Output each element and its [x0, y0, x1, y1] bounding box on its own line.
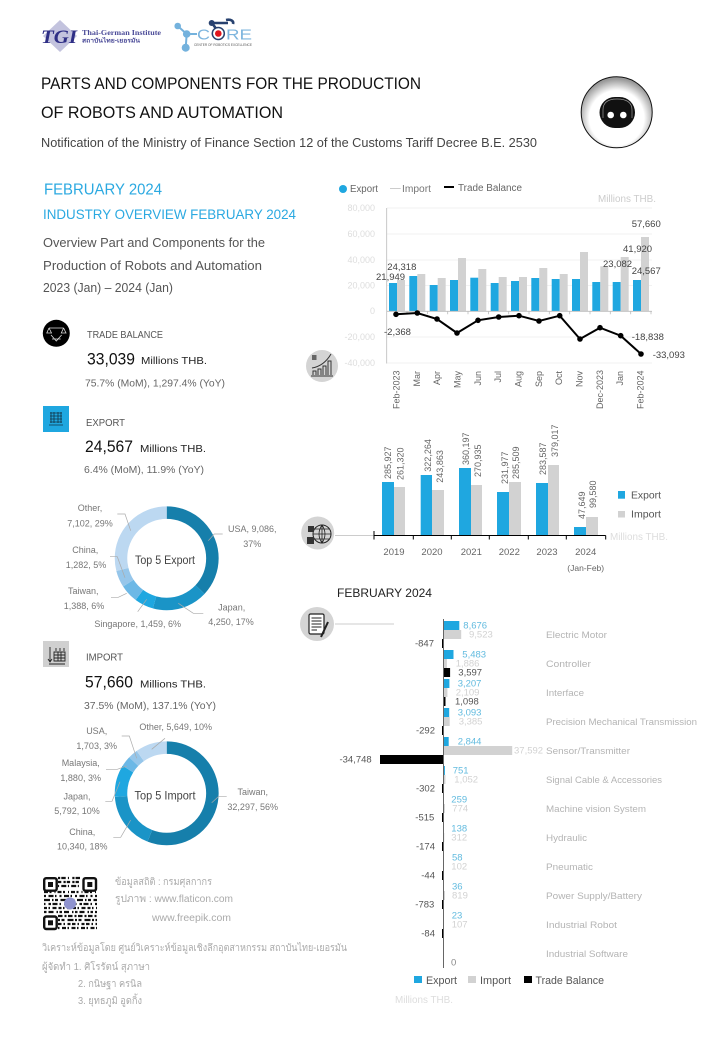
- icon: notebook: [300, 607, 334, 641]
- subtitle: Notification of the Ministry of Finance Section 12 of the Customs Tariff Decree B.E. 2530: [41, 135, 537, 150]
- year labels: 2020: [421, 547, 443, 558]
- data labels: 21,949: [376, 272, 405, 283]
- chart: top 5 import donut: Malaysia,: [62, 758, 100, 768]
- trade balance line: [393, 310, 644, 357]
- data labels: 24,567: [632, 266, 661, 277]
- chart: monthly export, import and trade balance: 40,000: [347, 255, 375, 265]
- data labels: -18,838: [632, 332, 664, 343]
- bar value labels: 283,587: [538, 442, 548, 475]
- month labels: May: [452, 371, 462, 388]
- month labels: Jul: [493, 371, 503, 383]
- trade balance values: -174: [416, 842, 435, 852]
- logo: CORE Center of Robotics Excellence: RE: [226, 26, 252, 44]
- chart: top 5 import donut: 10,340, 18%: [57, 842, 108, 852]
- category labels: Controller: [546, 659, 591, 670]
- trade balance values: [339, 638, 482, 968]
- category labels: Industrial Software: [546, 949, 628, 960]
- logo: CORE Center of Robotics Excellence: CENTER OF ROBOTICS EXCELLENCE: [194, 43, 252, 47]
- import values: 774: [452, 804, 468, 814]
- month labels: Dec-2023: [595, 370, 605, 409]
- import values: 107: [452, 920, 468, 930]
- month labels: Nov: [574, 371, 584, 387]
- export values: 3,207: [458, 678, 481, 690]
- chart: top 5 import donut: 5,792, 10%: [54, 806, 100, 816]
- text block: sources: ข้อมูลสถิติ : กรมศุลกากร: [115, 876, 213, 888]
- export values: 2,844: [458, 736, 481, 748]
- chart: top 5 export donut: China,: [72, 545, 98, 555]
- export values: 23: [452, 910, 462, 922]
- chart: top 5 export donut: Singapore, 1,459, 6%: [94, 619, 181, 629]
- bar value labels: 322,264: [423, 439, 433, 472]
- text block: overview: 2023 (Jan) – 2024 (Jan): [43, 280, 173, 295]
- chart: top 5 import donut: 1,880, 3%: [60, 773, 101, 783]
- icon: import goods: [43, 641, 69, 667]
- export values: 58: [452, 852, 463, 864]
- logo: TGI Thai-German Institute: Thai-German Institute: [82, 29, 161, 37]
- trade balance values: -302: [416, 784, 435, 794]
- text block: analysts: วิเคราะห์ข้อมูลโดย ศูนย์วิเคราะห์ข้อมูลเชิงลึกอุตสาหกรรม สถาบันไทย-เยอรมัน: [42, 941, 347, 954]
- chart: top 5 import donut: Taiwan,: [237, 787, 268, 797]
- panel: trade balance: 33,039: [87, 349, 135, 368]
- chart: monthly export, import and trade balance: -40,000: [344, 358, 375, 368]
- legend: [618, 490, 661, 520]
- panel: export: 24,567: [85, 437, 133, 456]
- export values: 3,093: [458, 708, 481, 718]
- category labels: Precision Mechanical Transmission: [546, 717, 697, 728]
- import bars: [397, 237, 649, 311]
- month labels: Sep: [534, 371, 544, 387]
- legend: Import: [402, 184, 431, 195]
- month labels: Mar: [412, 371, 422, 386]
- bar value labels: 231,977: [500, 451, 510, 484]
- trade balance values: -847: [415, 638, 434, 650]
- chart: top 5 export donut: Top 5 Export: [135, 553, 196, 567]
- panel: import: 57,660: [85, 673, 133, 692]
- icon: robot head: [581, 77, 652, 148]
- month labels: Jun: [473, 371, 483, 386]
- trade balance values: -34,748: [339, 754, 372, 766]
- bar value labels: [383, 424, 598, 519]
- panel: trade balance: TRADE BALANCE: [87, 329, 163, 341]
- chart: parts by category: [339, 619, 697, 1006]
- chart: parts by category: Millions THB.: [395, 994, 453, 1006]
- import values: [451, 630, 543, 930]
- year labels: [383, 547, 604, 573]
- data labels: 23,082: [603, 259, 632, 270]
- chart: top 5 export donut: 1,388, 6%: [64, 601, 104, 611]
- category labels: [546, 630, 697, 960]
- chart: top 5 export donut: Other,: [78, 503, 102, 513]
- text block: sources: www.freepik.com: [151, 913, 231, 924]
- heading: February 2024: FEBRUARY 2024: [337, 586, 432, 600]
- chart: top 5 export donut: 1,282, 5%: [66, 560, 106, 570]
- legend: [339, 183, 522, 195]
- panel: import: [43, 641, 216, 712]
- category labels: Interface: [546, 688, 584, 699]
- data labels: -33,093: [653, 350, 685, 361]
- trade balance values: 0: [451, 958, 456, 968]
- year labels: 2022: [499, 547, 520, 558]
- icon: QR code: [44, 878, 97, 929]
- legend: Export: [350, 184, 378, 195]
- import values: 102: [451, 862, 467, 872]
- export values: 8,676: [463, 620, 487, 632]
- bar value labels: 47,649: [577, 491, 587, 519]
- text block: overview: [43, 235, 265, 295]
- month labels: Feb-2023: [392, 370, 402, 409]
- panel: trade balance: Millions THB.: [141, 355, 207, 367]
- logo: TGI Thai-German Institute: สถาบันไทย-เยอรมัน: [82, 36, 141, 44]
- trade balance values: -84: [421, 928, 435, 940]
- panel: trade balance: [43, 320, 225, 390]
- month labels: Feb-2024: [636, 370, 646, 409]
- import values: 1,052: [454, 774, 478, 786]
- export bars: [444, 621, 459, 804]
- chart: top 5 import donut: Japan,: [63, 791, 91, 801]
- month labels: Oct: [554, 371, 564, 385]
- chart: top 5 import donut: Top 5 Import: [134, 788, 196, 802]
- text block: analysts: [42, 941, 347, 1007]
- export values: 259: [451, 794, 467, 806]
- chart: top 5 export donut: 7,102, 29%: [67, 518, 113, 528]
- chart: monthly export, import and trade balance: -20,000: [344, 332, 375, 342]
- legend: Export: [426, 975, 457, 987]
- panel: export: Millions THB.: [140, 443, 206, 455]
- bar value labels: 261,320: [396, 447, 406, 480]
- chart: top 5 import donut: Other, 5,649, 10%: [139, 722, 212, 732]
- bar value labels: 270,935: [473, 444, 483, 477]
- trade balance bars: [380, 639, 450, 938]
- chart: monthly export, import and trade balance: [339, 183, 685, 409]
- data labels: 24,318: [387, 262, 416, 273]
- chart: top 5 export donut: Japan,: [218, 602, 245, 612]
- text block: overview: Overview Part and Components for the: [43, 235, 265, 250]
- panel: export: [43, 406, 206, 476]
- chart: annual export and import: Millions THB.: [610, 531, 668, 543]
- panel: trade balance: 75.7% (MoM), 1,297.4% (YoY): [85, 378, 225, 390]
- chart: top 5 import donut: USA,: [86, 726, 107, 736]
- chart: top 5 import donut: China,: [69, 827, 95, 837]
- year labels: 2024: [575, 547, 596, 558]
- trade balance values: 1,098: [455, 696, 479, 708]
- export values: [451, 620, 487, 922]
- panel: export: 6.4% (MoM), 11.9% (YoY): [84, 464, 204, 476]
- bar value labels: 360,197: [461, 432, 471, 465]
- export bars: [382, 468, 586, 536]
- chart: top 5 export donut: [64, 503, 277, 629]
- export values: 36: [452, 882, 463, 892]
- logo: TGI Thai-German Institute: [41, 20, 161, 52]
- text block: overview: Production of Robots and Automation: [43, 258, 262, 273]
- chart: top 5 export donut: 4,250, 17%: [208, 617, 254, 627]
- import bars: [444, 630, 512, 900]
- chart: top 5 import donut: 1,703, 3%: [76, 741, 117, 751]
- panel: export: EXPORT: [86, 417, 126, 429]
- import values: 1,886: [456, 658, 479, 670]
- import values: 3,385: [459, 716, 482, 728]
- category labels: Signal Cable & Accessories: [546, 775, 662, 786]
- trade balance values: -292: [416, 726, 435, 736]
- category labels: Hydraulic: [546, 833, 587, 844]
- trade balance values: -515: [415, 812, 434, 824]
- legend: Import: [480, 975, 511, 987]
- panel: import: 37.5% (MoM), 137.1% (YoY): [84, 700, 216, 712]
- logo: CORE Center of Robotics Excellence: C: [197, 26, 210, 44]
- category labels: Electric Motor: [546, 630, 607, 641]
- text block: analysts: 3. ยุทธภูมิ อูดกิ้ง: [78, 993, 142, 1007]
- text block: sources: [115, 876, 233, 924]
- year labels: 2023: [536, 547, 558, 558]
- month labels: [392, 370, 646, 409]
- icon: scales: [43, 320, 70, 347]
- category labels: Sensor/Transmitter: [546, 746, 630, 757]
- trade balance values: -44: [421, 870, 435, 882]
- icon: export container: [43, 406, 69, 432]
- data labels: -2,368: [384, 327, 411, 338]
- data labels: [376, 219, 685, 361]
- year labels: (Jan-Feb): [567, 563, 604, 573]
- bar value labels: 243,863: [435, 450, 445, 483]
- heading: month: FEBRUARY 2024: [44, 182, 162, 198]
- text block: sources: รูปภาพ : www.flaticon.com: [115, 894, 233, 905]
- import values: 37,592: [514, 746, 543, 756]
- bar value labels: 379,017: [550, 424, 560, 457]
- bar value labels: 285,509: [511, 446, 521, 479]
- title: [41, 75, 421, 122]
- trade balance values: 3,597: [458, 668, 482, 678]
- legend: Trade Balance: [458, 183, 522, 194]
- chart: top 5 import donut: [54, 722, 278, 852]
- icon: growth chart: [306, 350, 338, 382]
- panel: import: Millions THB.: [140, 679, 206, 691]
- chart: monthly export, import and trade balance: 20,000: [347, 280, 375, 290]
- text block: analysts: 2. กนิษฐา ครนิล: [78, 979, 142, 990]
- text block: analysts: ผู้จัดทำ 1. ศิโรรัตน์ สุภาษา: [42, 960, 150, 973]
- data labels: 57,660: [632, 219, 661, 230]
- bar value labels: 285,927: [383, 446, 393, 479]
- logo: TGI Thai-German Institute: TGI: [41, 27, 78, 48]
- export values: 138: [451, 824, 467, 834]
- category labels: Power Supply/Battery: [546, 891, 642, 902]
- export values: 751: [453, 766, 469, 776]
- chart: monthly export, import and trade balance: 0: [370, 306, 375, 316]
- import values: 9,523: [469, 630, 493, 640]
- category labels: Industrial Robot: [546, 920, 617, 931]
- chart: top 5 export donut: 37%: [243, 539, 261, 549]
- category labels: Pneumatic: [546, 862, 593, 873]
- panel: import: IMPORT: [86, 652, 124, 664]
- legend: Trade Balance: [536, 975, 604, 987]
- chart: annual export and import: [335, 424, 668, 573]
- import values: 312: [451, 832, 467, 844]
- heading: industry overview: INDUSTRY OVERVIEW FEBRUARY 2024: [43, 206, 296, 222]
- chart: top 5 export donut: Taiwan,: [68, 586, 99, 596]
- export bars: [389, 276, 641, 311]
- legend: Import: [631, 508, 661, 520]
- legend: [414, 975, 604, 987]
- year labels: 2019: [383, 547, 405, 558]
- chart: top 5 export donut: USA, 9,086,: [228, 524, 277, 534]
- category labels: Machine vision System: [546, 804, 646, 815]
- trade balance values: -783: [415, 900, 434, 910]
- title: OF ROBOTS AND AUTOMATION: [41, 104, 283, 122]
- legend: Export: [631, 490, 661, 502]
- chart: monthly export, import and trade balance: 80,000: [347, 203, 375, 213]
- data labels: 41,920: [623, 244, 652, 255]
- year labels: 2021: [461, 547, 482, 558]
- export values: 5,483: [462, 650, 486, 660]
- logo: CORE Center of Robotics Excellence: [174, 20, 252, 52]
- chart: top 5 import donut: 32,297, 56%: [227, 802, 278, 812]
- bar value labels: 99,580: [588, 480, 598, 508]
- month labels: Aug: [514, 371, 524, 387]
- month labels: Apr: [432, 371, 442, 385]
- month labels: Jan: [615, 371, 625, 386]
- title: PARTS AND COMPONENTS FOR THE PRODUCTION: [41, 75, 421, 93]
- icon: globe and goods: [301, 516, 334, 550]
- chart: monthly export, import and trade balance: Millions THB.: [598, 193, 656, 205]
- import values: 2,109: [456, 688, 479, 698]
- import bars: [394, 465, 598, 536]
- chart: monthly export, import and trade balance: 60,000: [347, 229, 375, 239]
- import values: 819: [452, 890, 468, 902]
